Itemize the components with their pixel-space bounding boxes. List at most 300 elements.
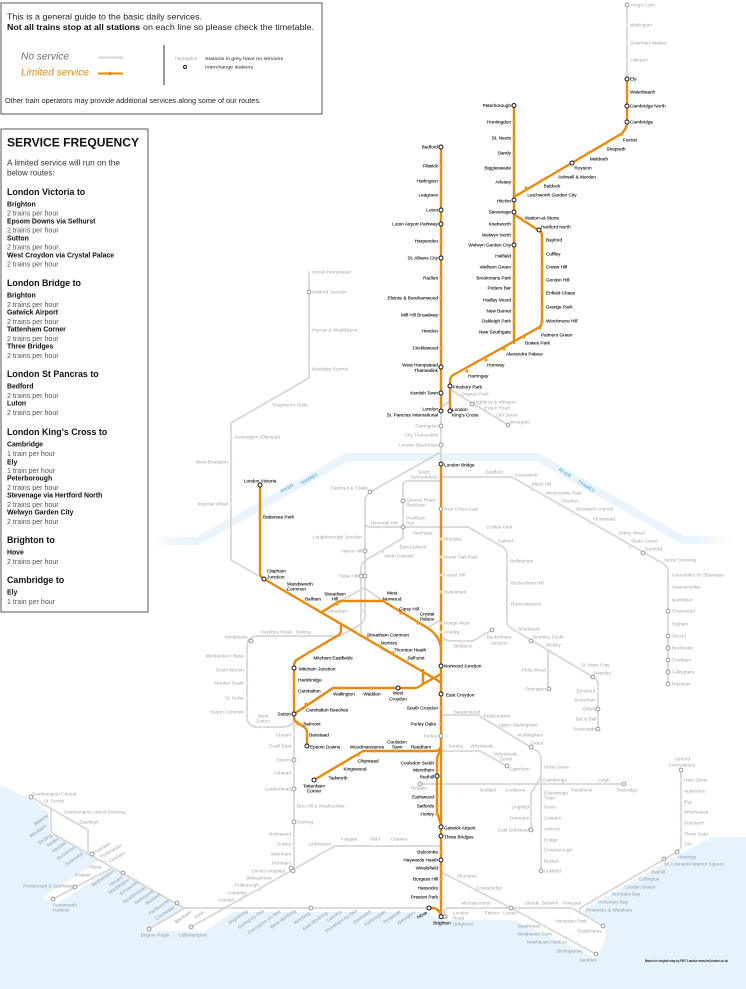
station names: no service: Sanderstead [454, 710, 481, 714]
station names: no service: Polegate [563, 900, 582, 906]
station names: no service: Ashford [674, 756, 690, 762]
station names: no service: Kensington (Olympia) [235, 434, 281, 440]
station names: limited service: Haywards Heath [403, 858, 438, 862]
station names: no service: Oxted [531, 740, 544, 746]
station names: limited service: Gatwick Airport [444, 826, 476, 830]
station names: limited service: Welham Green [480, 264, 511, 270]
station names: no service: Peckham [406, 502, 426, 508]
station names: no service: Whyteleafe [494, 752, 518, 756]
Brighton routes: Hove [7, 550, 24, 556]
station names: limited service: South Croydon [407, 706, 438, 710]
London Victoria routes: 2 trains per hour [7, 260, 59, 268]
station names: no service: West Brompton [196, 460, 228, 464]
station names: no service: Horsham [272, 860, 291, 866]
station names: no service: Arundel [218, 898, 234, 902]
station names: limited service: Welwyn Garden City [468, 242, 512, 248]
station names: limited service: Norwood [383, 596, 402, 602]
London St Pancras routes: London St Pancras to [7, 369, 99, 379]
station names: limited service: Harpenden [415, 238, 438, 244]
London King's Cross routes: 1 train per hour [7, 450, 56, 458]
station names: no service: Crofton Park [486, 524, 513, 530]
station names on the sea: Collington [639, 876, 660, 882]
station names: limited service: Huntingdon [487, 120, 511, 124]
station names: limited service: Chipstead [357, 758, 379, 764]
station names on the sea: Nutbourne [134, 888, 155, 905]
station names: limited service: New Southgate [479, 330, 511, 334]
station names: limited service: Hove [416, 910, 428, 920]
legend: no service [21, 52, 123, 62]
station names: limited service: Shepreth [606, 146, 626, 152]
station names: no service: Higham [672, 622, 688, 626]
station names: no service: Nunhead [413, 530, 433, 536]
London Victoria routes: West Croydon via Crystal Palace [7, 252, 114, 260]
station names: no service: Maze Hill [532, 482, 551, 486]
station names: limited service: Earlswood [412, 794, 434, 800]
intro text: This is a general guide to the basic daily services. [7, 12, 202, 22]
station names on the sea: Bitterne [33, 813, 49, 827]
grey station ticks [42, 24, 682, 944]
station names: no service: Hever [544, 804, 557, 810]
London Victoria routes: London Victoria to [7, 187, 86, 197]
station names: no service: Shepherd's Bush [272, 402, 308, 408]
station names: no service: Eastleigh [79, 820, 99, 824]
station names: no service: Elephant & Castle [330, 486, 368, 490]
station names: no service: Highbury & Islington [474, 400, 516, 404]
station names: no service: Junction [490, 640, 508, 646]
station names: no service: Leigh [598, 778, 610, 782]
station names: no service: Petts Wood [522, 668, 546, 672]
station names: limited service: Cuffley [546, 252, 561, 256]
station names: no service: Riddlesdown [484, 714, 511, 718]
station names: no service: Essex Road [484, 406, 510, 410]
station names: limited service: Stevenage [489, 210, 511, 214]
station names on the sea: Harbour [53, 908, 70, 912]
station names: limited service: Hendon [422, 328, 438, 334]
station names: limited service: Three Bridges [444, 834, 474, 840]
station names: limited service: Wivelsfield [416, 866, 438, 870]
station names: no service: Beckenham Hill [511, 580, 544, 586]
station names: no service: Tonbridge [617, 788, 638, 792]
legend: limited service [21, 68, 123, 78]
station names on the sea: Seaford [580, 958, 597, 962]
station names: limited service: Wallington [333, 692, 355, 696]
station names: limited service: Croydon [389, 696, 407, 702]
station names: limited service: Hackbridge [298, 678, 322, 682]
river Thames [150, 457, 735, 541]
station names on the sea: Swanwick [64, 851, 85, 867]
station names: limited service: Crews Hill [546, 264, 567, 270]
station names: no service: Southampton Central [32, 792, 76, 796]
station names on the sea: Chichester [154, 904, 176, 921]
station names: no service: Otford [582, 706, 596, 712]
London King's Cross routes: 1 train per hour [7, 467, 56, 475]
intro text: Not all trains stop at all stations [7, 23, 140, 32]
station names on the sea: Normans Bay [612, 892, 641, 896]
station names: no service: Appledore [684, 788, 706, 794]
station names: no service: Bickley [546, 642, 562, 648]
station names: no service: East Grinstead [498, 828, 529, 832]
station names: limited service: Welwyn North [482, 232, 511, 238]
London King's Cross routes: London King's Cross to [7, 427, 108, 437]
station names: limited service: Meldreth [590, 156, 609, 162]
station names: limited service: Mitcham Junction [299, 666, 336, 672]
station names: no service: Greenhithe for Bluewater [672, 572, 725, 578]
station names: limited service: Thameslink [414, 368, 439, 373]
station names: limited service: Sandy [498, 150, 512, 156]
Cambridge routes: Cambridge to [7, 575, 65, 585]
station names: no service: London Blackfriars [399, 442, 439, 448]
station names: no service: Sydenham [444, 590, 467, 594]
station names: no service: Christ's Hospital [251, 868, 285, 874]
London Bridge routes: 2 trains per hour [7, 318, 59, 326]
orange station ticks [258, 90, 629, 899]
station names on the sea: Bedhampton [91, 868, 116, 888]
station names on the sea: Fishbourne [148, 898, 170, 916]
station names: limited service: Crystal [420, 612, 434, 616]
station names: no service: Woolwich Arsenal [576, 506, 613, 512]
station names: no service: Deptford [485, 470, 503, 474]
London Bridge routes: 2 trains per hour [7, 335, 59, 343]
station names: limited service: Leagrave [418, 192, 438, 198]
London Bridge routes: Three Bridges [7, 344, 54, 350]
station names on the sea: East Worthing [302, 910, 329, 931]
station names: no service: Nutfield [480, 788, 496, 792]
station names on the sea: Bishopstone [557, 948, 583, 954]
station names: no service: Swanley [593, 670, 611, 676]
station names on the sea: Hastings [678, 854, 697, 860]
station names on the sea: Durrington-on-Sea [247, 909, 282, 935]
station names: no service: South Merton [216, 668, 244, 672]
station names: limited service: Palmers Green [541, 332, 573, 338]
station names on the sea: Bosham [145, 892, 162, 906]
station names: limited service: Salfords [417, 804, 435, 808]
London King's Cross routes: Stevenage via Hertford North [7, 492, 102, 500]
station names: no service: Rye [406, 520, 415, 526]
station names: no service: Honor Oak Park [444, 554, 478, 560]
station names: no service: Purley [424, 734, 438, 738]
London Bridge routes: Tattenham Corner [7, 326, 66, 334]
London Bridge routes: Gatwick Airport [7, 310, 59, 316]
London St Pancras routes [7, 369, 99, 417]
station names: limited service: London Victoria [244, 478, 277, 484]
London St Pancras routes: 2 trains per hour [7, 409, 59, 417]
station names: no service: Peckham [406, 516, 426, 520]
London Victoria routes: 2 trains per hour [7, 244, 59, 252]
station names: no service: Dartford [645, 546, 662, 552]
station names: limited service: Town [392, 744, 403, 750]
station names: no service: Tooting [295, 630, 311, 634]
station names: no service: Penshurst [571, 788, 593, 792]
station names: no service: North Dulwich [384, 554, 414, 558]
station names: limited service: St. Neots [492, 136, 512, 140]
station names: no service: Queens Road [406, 498, 435, 502]
station names: limited service: West [393, 690, 404, 696]
London Bridge routes: 2 trains per hour [7, 301, 59, 309]
station names: no service: Hampden Park [555, 918, 587, 924]
station names: no service: Edenbridge [543, 778, 567, 782]
station names: no service: Shoreham [574, 698, 596, 702]
station names: no service: Crawley [391, 836, 408, 842]
station names: limited service: Merstham [413, 768, 434, 772]
station names: limited service: New Barnet [486, 308, 512, 314]
station names: no service: Billingshurst [246, 876, 272, 880]
station names: limited service: Belmont [303, 722, 321, 726]
station names: limited service: Coulsdon [387, 740, 407, 744]
station names: limited service: Redhill [420, 774, 434, 780]
station names: limited service: Harlington [417, 178, 438, 184]
station names: no service: Plumstead [593, 516, 616, 522]
station names: no service: Watford Junction [312, 290, 347, 294]
London Victoria routes: Sutton [7, 236, 29, 242]
station names: no service: Strood [672, 634, 686, 638]
station names on the sea: Southwick [352, 908, 373, 925]
London King's Cross routes: 2 trains per hour [7, 501, 59, 509]
station names: no service: Fratton [75, 872, 90, 878]
station names: no service: Harrow & Wealdstone [312, 328, 358, 332]
station names: limited service: Brookmans Park [476, 276, 512, 280]
station names on the sea: Portslade [382, 909, 402, 925]
station names: no service: Godstone [505, 788, 526, 792]
station names: no service: Leatherhead [265, 786, 291, 792]
station names: no service: Loughborough Junction [313, 534, 362, 540]
station names: limited service: Gipsy Hill [399, 606, 419, 612]
intro text: on each line so please check the timetable. [143, 23, 314, 32]
map credit: Based on original map by FWT London www.fwt.london.co.uk [645, 959, 728, 963]
station names: no service: Chatham [672, 658, 691, 662]
station names: no service: Edenbridge [544, 790, 568, 796]
station names on the sea: Southbourne [122, 885, 147, 905]
Brighton routes: Brighton to [7, 535, 55, 545]
station names: no service: Hemel Hempstead [312, 270, 351, 274]
station names: no service: Pulborough [235, 882, 259, 888]
London King's Cross routes: 2 trains per hour [7, 484, 59, 492]
station names: limited service: Kentish Town [410, 390, 438, 396]
station names: no service: Beckenham [487, 634, 511, 640]
station names: limited service: Selhurst [407, 656, 425, 660]
station names: limited service: West [387, 590, 398, 596]
station names: limited service: Potters Bar [488, 286, 511, 290]
station names: no service: Rochester [672, 646, 694, 650]
station names: no service: Plumpton [457, 874, 477, 878]
river Thames: THAMES [577, 479, 595, 493]
London Victoria routes [7, 187, 114, 268]
legend: no service: No service [21, 52, 69, 62]
station names: no service: Wimbledon [225, 634, 248, 640]
station names: no service: Winchelsea [684, 810, 709, 814]
station names: limited service: Bayford [546, 238, 563, 242]
station names: no service: Lingfield [512, 804, 529, 810]
station names: no service: Northfleet [672, 598, 693, 602]
station names: limited service: Hadley Wood [483, 298, 511, 302]
station names on the sea: Bognor Regis [141, 932, 170, 938]
station names on the sea: Bursledon [56, 845, 76, 861]
station names: limited service: Epsom Downs [310, 744, 341, 750]
limited-service interchange stations [258, 77, 629, 919]
station names on the sea: Netley [46, 836, 60, 848]
London King's Cross routes [7, 427, 108, 526]
river Thames: RIVER [280, 482, 295, 494]
station names: limited service: Luton [426, 208, 438, 212]
station names: no service: Cooksbridge [476, 886, 503, 890]
station names: no service: Buxted [544, 858, 559, 864]
station names: limited service: Flitwick [423, 164, 439, 168]
station names: no service: Kenley [449, 744, 464, 748]
station names: no service: Southampton Airport Parkway [64, 810, 127, 814]
station names: no service: Ifield [370, 836, 380, 842]
station names: limited service: Palace [420, 616, 435, 622]
station names: limited service: Norbury [381, 640, 398, 646]
station names: no service: Berwick [542, 900, 559, 906]
station names: no service: Ravensbourne [511, 602, 542, 606]
station names: limited service: Tattenham [303, 784, 325, 788]
station names: limited service: Arlesey [495, 180, 512, 184]
station names: no service: Imperial Wharf [198, 502, 229, 506]
station names: limited service: Balcombe [417, 850, 438, 854]
London Bridge routes: London Bridge to [7, 278, 82, 288]
sea and coastline [0, 785, 746, 989]
station names: limited service: London Bridge [444, 462, 475, 468]
Cambridge routes: 1 train per hour [7, 598, 56, 606]
station names: limited service: Watton-at-Stone [525, 216, 559, 220]
station names: no service: Farringdon [415, 424, 438, 428]
station names: limited service: East Croydon [446, 692, 475, 698]
station names: no service: Wembley Central [312, 366, 348, 372]
station names on the sea: Hamble [51, 840, 67, 854]
station names: no service: Crowborough [544, 848, 573, 852]
station names: no service: Anerley [444, 630, 461, 634]
station names: limited service: Baldock [544, 184, 561, 188]
station names: no service: Stone Crossing [664, 558, 696, 562]
station names: limited service: Horley [420, 812, 435, 816]
station names: no service: Abbey Wood [618, 530, 645, 536]
station names: no service: Brockley [444, 536, 463, 542]
station names: no service: Westcombe Park [546, 490, 582, 496]
Brighton routes [7, 535, 59, 566]
London King's Cross routes: Peterborough [7, 476, 52, 482]
station names on the sea: Woolston [29, 823, 48, 839]
station names on the sea: Lancing [326, 909, 342, 923]
station names: no service: King's Lynn [631, 2, 655, 8]
station names: no service: Littlehaven [309, 842, 332, 846]
station names: no service: City Thameslink [405, 432, 439, 438]
station names: limited service: Norwood Junction [444, 664, 482, 668]
station names: limited service: Common [287, 586, 306, 592]
Cambridge routes: Ely [7, 590, 18, 596]
station names: no service: Moorgate [510, 420, 530, 424]
station names: limited service: Wandsworth [287, 582, 313, 586]
station names: no service: Bromley South [533, 634, 564, 640]
station names: limited service: Radlett [423, 276, 439, 280]
station names: no service: Holmwood [269, 832, 291, 836]
station names: no service: Rye [684, 800, 693, 804]
station names: no service: Town [544, 796, 555, 800]
station names: no service: Doleham* [684, 820, 705, 826]
station names: no service: Morden South [215, 680, 244, 686]
station names: limited service: Elstree & Borehamwood [387, 296, 438, 300]
station names on the sea: Havant [108, 874, 124, 887]
station names: limited service: Hitchin [497, 198, 511, 204]
station names: limited service: Cricklewood [412, 346, 438, 350]
Cambridge routes [7, 575, 65, 606]
station names: no service: Eastbourne [578, 928, 602, 934]
station names on the sea: Barnham [174, 909, 192, 925]
station names on the sea: Pevensey & Westham [586, 908, 632, 912]
legend: station key: Interchange stations [205, 64, 254, 70]
station names: no service: South [500, 756, 513, 762]
station names: no service: Shortlands [518, 626, 541, 632]
station names: no service: Ashtead [274, 770, 291, 776]
station names: no service: Ore [684, 842, 692, 846]
note on other operators: Other train operators may provide additional services along some of our routes. [5, 98, 261, 105]
station names: limited service: Peterborough [483, 103, 511, 108]
station names on the sea: Warblington [107, 877, 131, 895]
station names on the sea: Portsmouth [53, 902, 77, 908]
station names: limited service: Hill [332, 596, 338, 602]
station names on the sea: Ford [194, 910, 205, 920]
station names: no service: East Dulwich [399, 544, 427, 550]
station names: limited service: Hassocks [418, 886, 439, 890]
station names: limited service: London [422, 406, 438, 412]
station names: limited service: Winchmore Hill [546, 318, 578, 324]
station names: no service: Charlton [561, 498, 579, 504]
station names: limited service: Streatham [324, 592, 346, 596]
station names: no service: Slade Green [631, 538, 658, 544]
station names: no service: Ham Street [684, 778, 708, 782]
intro: below routes: [7, 168, 55, 178]
legend: station key: Farringdon [175, 56, 198, 61]
station names: no service: Haydons Road [260, 630, 292, 634]
station names: no service: Tulse Hill [339, 574, 358, 578]
station names on the sea: Worthing [293, 910, 311, 925]
station names: no service: Glynde [525, 900, 540, 906]
station names: limited service: St. Pancras International [387, 412, 438, 418]
station names: no service: Swanscombe [672, 584, 701, 590]
station names: no service: International [669, 762, 695, 768]
pale station ticks on the main line [440, 538, 442, 634]
station names on the sea: Southease [518, 924, 541, 928]
station names: no service: Bat & Ball [576, 716, 596, 722]
station names: limited service: Balham [305, 596, 321, 602]
station names on the sea: Newhaven Town [518, 932, 553, 936]
station names: limited service: Burgess Hill [413, 876, 438, 882]
station names: limited service: Mill Hill Broadway [401, 312, 439, 318]
orange lines: limited service [260, 79, 627, 917]
London King's Cross routes: 2 trains per hour [7, 518, 59, 526]
station names: no service: West [258, 714, 269, 718]
station names: no service: St. Denys [44, 798, 65, 804]
station names: no service: Cowden [544, 816, 562, 820]
station names: limited service: Ely [630, 76, 637, 82]
station names: limited service: Carshalton Beeches [306, 708, 349, 712]
London Victoria routes: 2 trains per hour [7, 226, 59, 234]
London Victoria routes: 2 trains per hour [7, 210, 59, 218]
station names on the sea [23, 813, 724, 962]
station names: no service: Rainham [672, 682, 691, 686]
intro text [7, 12, 314, 32]
London Bridge routes: Brighton [7, 292, 36, 300]
station names on the sea: Emsworth [119, 880, 139, 896]
station names: no service: New Cross Gate [444, 506, 479, 512]
station names: limited service: Hornsey [487, 362, 505, 368]
station names: limited service: Waddon [363, 692, 381, 696]
station names on the sea: Portsmouth & Southsea [23, 884, 73, 888]
station names: no service: Denmark Hill [371, 520, 397, 526]
station names on the sea: Bexhill [651, 870, 665, 874]
station names: limited service: Grange Park [546, 304, 573, 310]
station names: no service: Ashurst [544, 826, 561, 832]
station names: limited service: Coulsdon South [401, 760, 434, 766]
station names: limited service: Gordon Hill [546, 278, 569, 282]
